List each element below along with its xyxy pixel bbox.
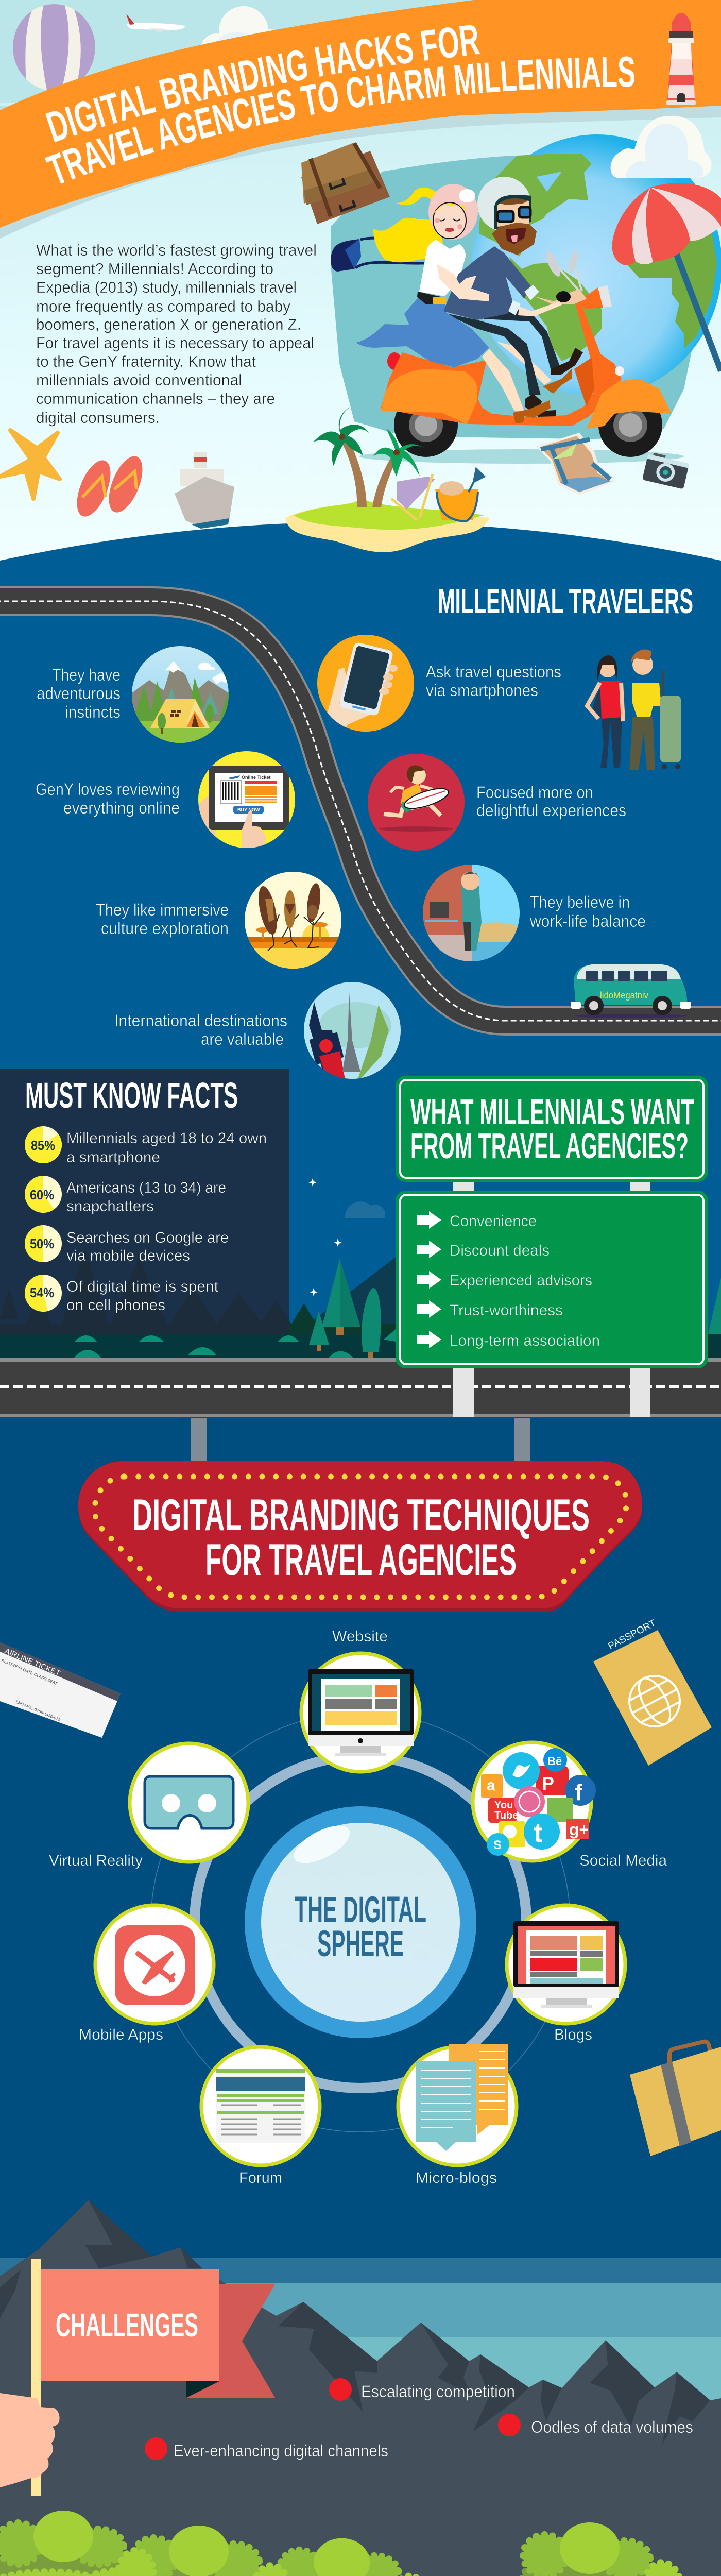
title: DIGITAL BRANDING HACKS FOR: [45, 25, 480, 142]
icon: bucket: [435, 469, 484, 521]
bubble: website: [301, 1653, 420, 1772]
intro text: to the GenY fraternity. Know that: [36, 352, 256, 370]
intro text: communication channels – they are: [36, 389, 275, 408]
thick ring: [195, 1756, 526, 2088]
item: international destinations: [114, 982, 401, 1079]
bubble: social media: t: [534, 1818, 542, 1848]
banner shadow: [0, 106, 721, 239]
challenge: digital channels: Ever-enhancing digital channels: [174, 2442, 388, 2460]
road sign: list of wants: Convenience: [450, 1213, 537, 1230]
sky bands: [0, 2258, 721, 2441]
night scene: clouds, mountains, trees: [0, 1178, 721, 1360]
fact: 50%: 50%: [30, 1236, 54, 1251]
icon: airline ticket: [0, 1642, 121, 1738]
bubble: blogs: [507, 1905, 625, 2024]
woman head: [428, 184, 478, 240]
bubble labels: Social Media: [579, 1852, 667, 1869]
item: reviewing online: BUY NOW: [237, 807, 260, 812]
fact: 85%: a smartphone: [66, 1149, 160, 1166]
intro text: digital consumers.: [36, 409, 160, 427]
central sphere: THE DIGITAL: [295, 1890, 426, 1930]
item: smartphones: Ask travel questions: [426, 663, 561, 681]
icon: globe: [472, 134, 721, 396]
item: adventurous: adventurous: [37, 684, 121, 703]
item: smartphones: via smartphones: [426, 681, 538, 700]
sign posts: [453, 1180, 650, 1418]
belt: [417, 292, 446, 304]
background: light lower sky: [0, 103, 721, 567]
road sign: list of wants: [396, 1191, 708, 1368]
bubble labels: [49, 1628, 667, 2187]
central sphere: SPHERE: [317, 1924, 404, 1964]
item: smartphones: [317, 635, 561, 732]
icon: hand: [0, 2393, 60, 2487]
bubble: mobile apps: [95, 1905, 214, 2024]
item: work-life balance: work-life balance: [529, 912, 646, 930]
marquee sign: FOR TRAVEL AGENCIES: [205, 1535, 517, 1585]
icon: cloud right: [611, 116, 712, 178]
intro text: What is the world’s fastest growing travel: [36, 241, 317, 259]
fact: 85%: Millennials aged 18 to 24 own: [66, 1130, 267, 1147]
bubble labels: Blogs: [554, 2026, 592, 2043]
item: adventurous: [37, 646, 229, 743]
road sign: list of wants: Long-term association: [450, 1332, 600, 1349]
fact: 54%: on cell phones: [66, 1297, 165, 1314]
bubble: social media: Bē: [547, 1755, 562, 1768]
island: [285, 499, 490, 552]
bubble: forum: [201, 2047, 320, 2165]
item: adventurous: They have: [52, 666, 121, 684]
woman skirt: [356, 296, 489, 367]
item: delightful experiences: Focused more on: [476, 783, 593, 802]
mountains: [0, 2200, 721, 2576]
fact: 50%: via mobile devices: [66, 1247, 190, 1264]
bubble: social media: f: [575, 1780, 582, 1805]
icon: passport: PASSPORT: [606, 1618, 658, 1652]
fact: 60%: snapchatters: [66, 1198, 154, 1215]
icon: palm trees: [313, 407, 425, 507]
bubble labels: Website: [332, 1628, 388, 1645]
bubble labels: Forum: [239, 2170, 282, 2187]
bubble labels: Micro-blogs: [416, 2170, 497, 2187]
icon: beach umbrella: [612, 183, 721, 371]
flag: challenges: [0, 2259, 275, 2496]
item: reviewing online: Online Ticket: [242, 775, 270, 780]
fact: 60%: [25, 1176, 226, 1215]
fact: 50%: Searches on Google are: [66, 1229, 229, 1246]
woman arm: [437, 264, 489, 301]
bubble: social media: a: [487, 1777, 495, 1794]
icon: airline ticket: LND-MSC-0706-1430-078: [15, 1700, 61, 1723]
icon: flip flops: [70, 451, 149, 521]
icon: vintage van: lidoMegatniv: [600, 990, 648, 1001]
background: sky: [0, 0, 721, 155]
fact: 60%: 60%: [30, 1187, 54, 1202]
shoes: [513, 348, 583, 423]
man legs: [443, 308, 560, 395]
item: adventurous: instincts: [65, 703, 121, 721]
purse: [331, 238, 433, 272]
icon: cloud behind banner: [192, 6, 285, 71]
fact: 50%: [25, 1225, 229, 1264]
bubble labels: Virtual Reality: [49, 1852, 143, 1869]
icon: airplane: [126, 14, 185, 32]
challenge: oodles of data: Oodles of data volumes: [531, 2418, 693, 2436]
icon: airline ticket: AIRLINE TICKET: [3, 1647, 61, 1678]
item: culture: [96, 872, 341, 969]
fact: 60%: Americans (13 to 34) are: [66, 1179, 226, 1196]
heading: facts: MUST KNOW FACTS: [25, 1075, 238, 1115]
icon: map: [536, 433, 616, 495]
intro text: boomers, generation X or generation Z.: [36, 315, 301, 333]
title: TRAVEL AGENCIES TO CHARM MILLENNIALS: [44, 57, 634, 184]
man head: [477, 177, 537, 255]
illustration: couple on scooter: [331, 177, 672, 457]
thin outer ring: [151, 1713, 570, 2132]
icon: lighthouse: [666, 13, 696, 105]
icon: suitcase: [630, 2042, 721, 2156]
road sign: what millennials want: [396, 1076, 708, 1182]
icon: deck chair: [391, 474, 435, 520]
fact: 54%: [25, 1275, 219, 1314]
diagram: digital sphere: [49, 1628, 667, 2187]
item: work-life balance: [423, 865, 646, 961]
fact: 54%: 54%: [30, 1285, 54, 1300]
road sign: list of wants: Trust-worthiness: [450, 1302, 563, 1319]
icon: vintage van: [571, 964, 691, 1018]
bubble: virtual reality: [130, 1743, 248, 1862]
item: culture: They like immersive: [96, 901, 229, 919]
illustration: young couple with luggage: [587, 650, 681, 770]
marquee sign: [78, 1461, 642, 1612]
intro text: For travel agents it is necessary to appeal: [36, 334, 314, 352]
item: reviewing online: GenY loves reviewing: [36, 780, 180, 799]
item: reviewing online: [36, 751, 295, 848]
icon: airline ticket: PLATFORM GATE CLASS SEAT: [1, 1658, 58, 1686]
fact: 85%: 85%: [31, 1138, 55, 1153]
intro text: segment? Millennials! According to: [36, 260, 273, 278]
fact: 54%: Of digital time is spent: [66, 1278, 219, 1295]
icon: hot air balloon: [13, 4, 95, 90]
forest: foreground trees: [0, 2511, 696, 2576]
item: work-life balance: They believe in: [530, 893, 630, 911]
front wheel: [598, 393, 662, 457]
road: straight: [0, 1358, 721, 1417]
road: winding: [0, 601, 721, 1021]
intro text: millennials avoid conventional: [36, 371, 242, 389]
intro text: [36, 241, 317, 427]
sign hangers: [191, 1418, 530, 1462]
fact: 85%: [25, 1126, 267, 1166]
bubble: social media: You: [494, 1800, 513, 1811]
icon: passport: [593, 1618, 712, 1766]
challenge: escalating competition: Escalating competition: [361, 2382, 515, 2401]
bubble: social media: g+: [569, 1820, 589, 1839]
flag: challenges: CHALLENGES: [56, 2307, 198, 2344]
item: delightful experiences: [368, 754, 626, 851]
road sign: list of wants: Discount deals: [450, 1242, 550, 1259]
intro text: more frequently as compared to baby: [36, 297, 290, 315]
hair strand: [396, 188, 445, 205]
item: international destinations: are valuable: [201, 1030, 284, 1048]
bubble: social media: [473, 1742, 596, 1861]
woman legs: [482, 342, 552, 411]
icon: cruise ship: [175, 452, 234, 529]
icon: camera: [642, 452, 690, 489]
bubble: micro-blogs: [398, 2044, 517, 2165]
item: international destinations: International destinations: [114, 1011, 287, 1030]
man torso: [443, 246, 530, 320]
scooter body: [381, 249, 672, 429]
icon: starfish: [0, 430, 60, 499]
central sphere: [245, 1806, 476, 2038]
item: delightful experiences: delightful experiences: [476, 801, 626, 820]
woman hair: [373, 218, 443, 262]
challenge: oodles of data: [498, 2414, 693, 2436]
bubble: social media: Tube: [494, 1810, 518, 1821]
item: culture: culture exploration: [101, 919, 229, 938]
tail light: [387, 352, 402, 370]
bubble: social media: P: [542, 1773, 554, 1794]
item: reviewing online: everything online: [63, 799, 180, 817]
man arms: [508, 285, 587, 316]
ocean background: [0, 522, 721, 1422]
panel: must know facts: [0, 1069, 289, 1334]
challenge: digital channels: [145, 2437, 388, 2460]
bubble: social media: S: [493, 1838, 502, 1852]
scooter ground shadow: [359, 449, 684, 464]
background: dark blue section: [0, 1417, 721, 2267]
panel: teal backdrop: [331, 156, 693, 439]
challenge: escalating competition: [329, 2378, 515, 2401]
icon: suitcases: [301, 143, 390, 224]
woman top: [419, 240, 466, 296]
rear wheel: [394, 393, 458, 457]
bubble labels: Mobile Apps: [79, 2026, 163, 2043]
intro text: Expedia (2013) study, millennials travel: [36, 278, 297, 296]
road sign: list of wants: Experienced advisors: [450, 1272, 592, 1289]
title banner: [0, 0, 721, 228]
